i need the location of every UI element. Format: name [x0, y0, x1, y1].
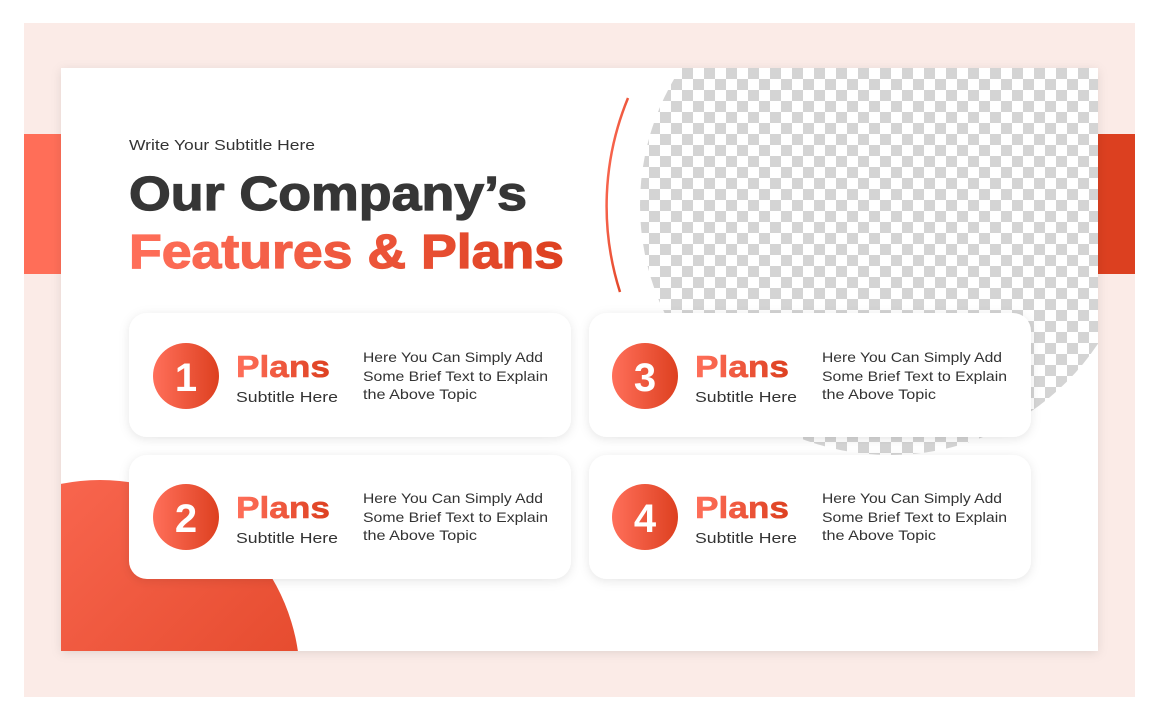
title: Our Company’s — [129, 168, 527, 221]
title — [129, 168, 564, 279]
card 3: Here You Can Simply Add — [822, 349, 1002, 365]
title: Features & Plans — [129, 226, 564, 279]
card 4: Plans — [695, 490, 789, 525]
card 2: 2 — [175, 497, 197, 541]
card 2: Here You Can Simply Add — [363, 490, 543, 506]
right accent band — [1095, 134, 1135, 274]
left accent band — [24, 134, 64, 274]
card 1 — [129, 313, 571, 437]
card 4: Subtitle Here — [695, 530, 797, 547]
card 2: Some Brief Text to Explain — [363, 509, 548, 525]
image placeholder circle — [640, 68, 1098, 455]
card 4: the Above Topic — [822, 527, 936, 543]
card 3: Subtitle Here — [695, 389, 797, 406]
card 3 — [589, 313, 1031, 437]
card 1: Here You Can Simply Add — [363, 349, 543, 365]
card 2: Subtitle Here — [236, 530, 338, 547]
card 4: 4 — [634, 497, 657, 541]
card 2: the Above Topic — [363, 527, 477, 543]
card 3: Plans — [695, 349, 789, 384]
card 1: Some Brief Text to Explain — [363, 368, 548, 384]
card 4: Some Brief Text to Explain — [822, 509, 1007, 525]
card 2 — [129, 455, 571, 579]
bottom-left orange circle — [61, 480, 298, 651]
decorative arc — [607, 98, 628, 292]
card 2: Plans — [236, 490, 330, 525]
subtitle: Write Your Subtitle Here — [129, 137, 315, 154]
card 1: 1 — [175, 356, 197, 400]
card 3: Some Brief Text to Explain — [822, 368, 1007, 384]
card 3: the Above Topic — [822, 386, 936, 402]
card 3: 3 — [634, 356, 656, 400]
card 4 — [589, 455, 1031, 579]
card 1: Subtitle Here — [236, 389, 338, 406]
slide panel — [61, 68, 1098, 651]
card 1: Plans — [236, 349, 330, 384]
card 4: Here You Can Simply Add — [822, 490, 1002, 506]
card 1: the Above Topic — [363, 386, 477, 402]
